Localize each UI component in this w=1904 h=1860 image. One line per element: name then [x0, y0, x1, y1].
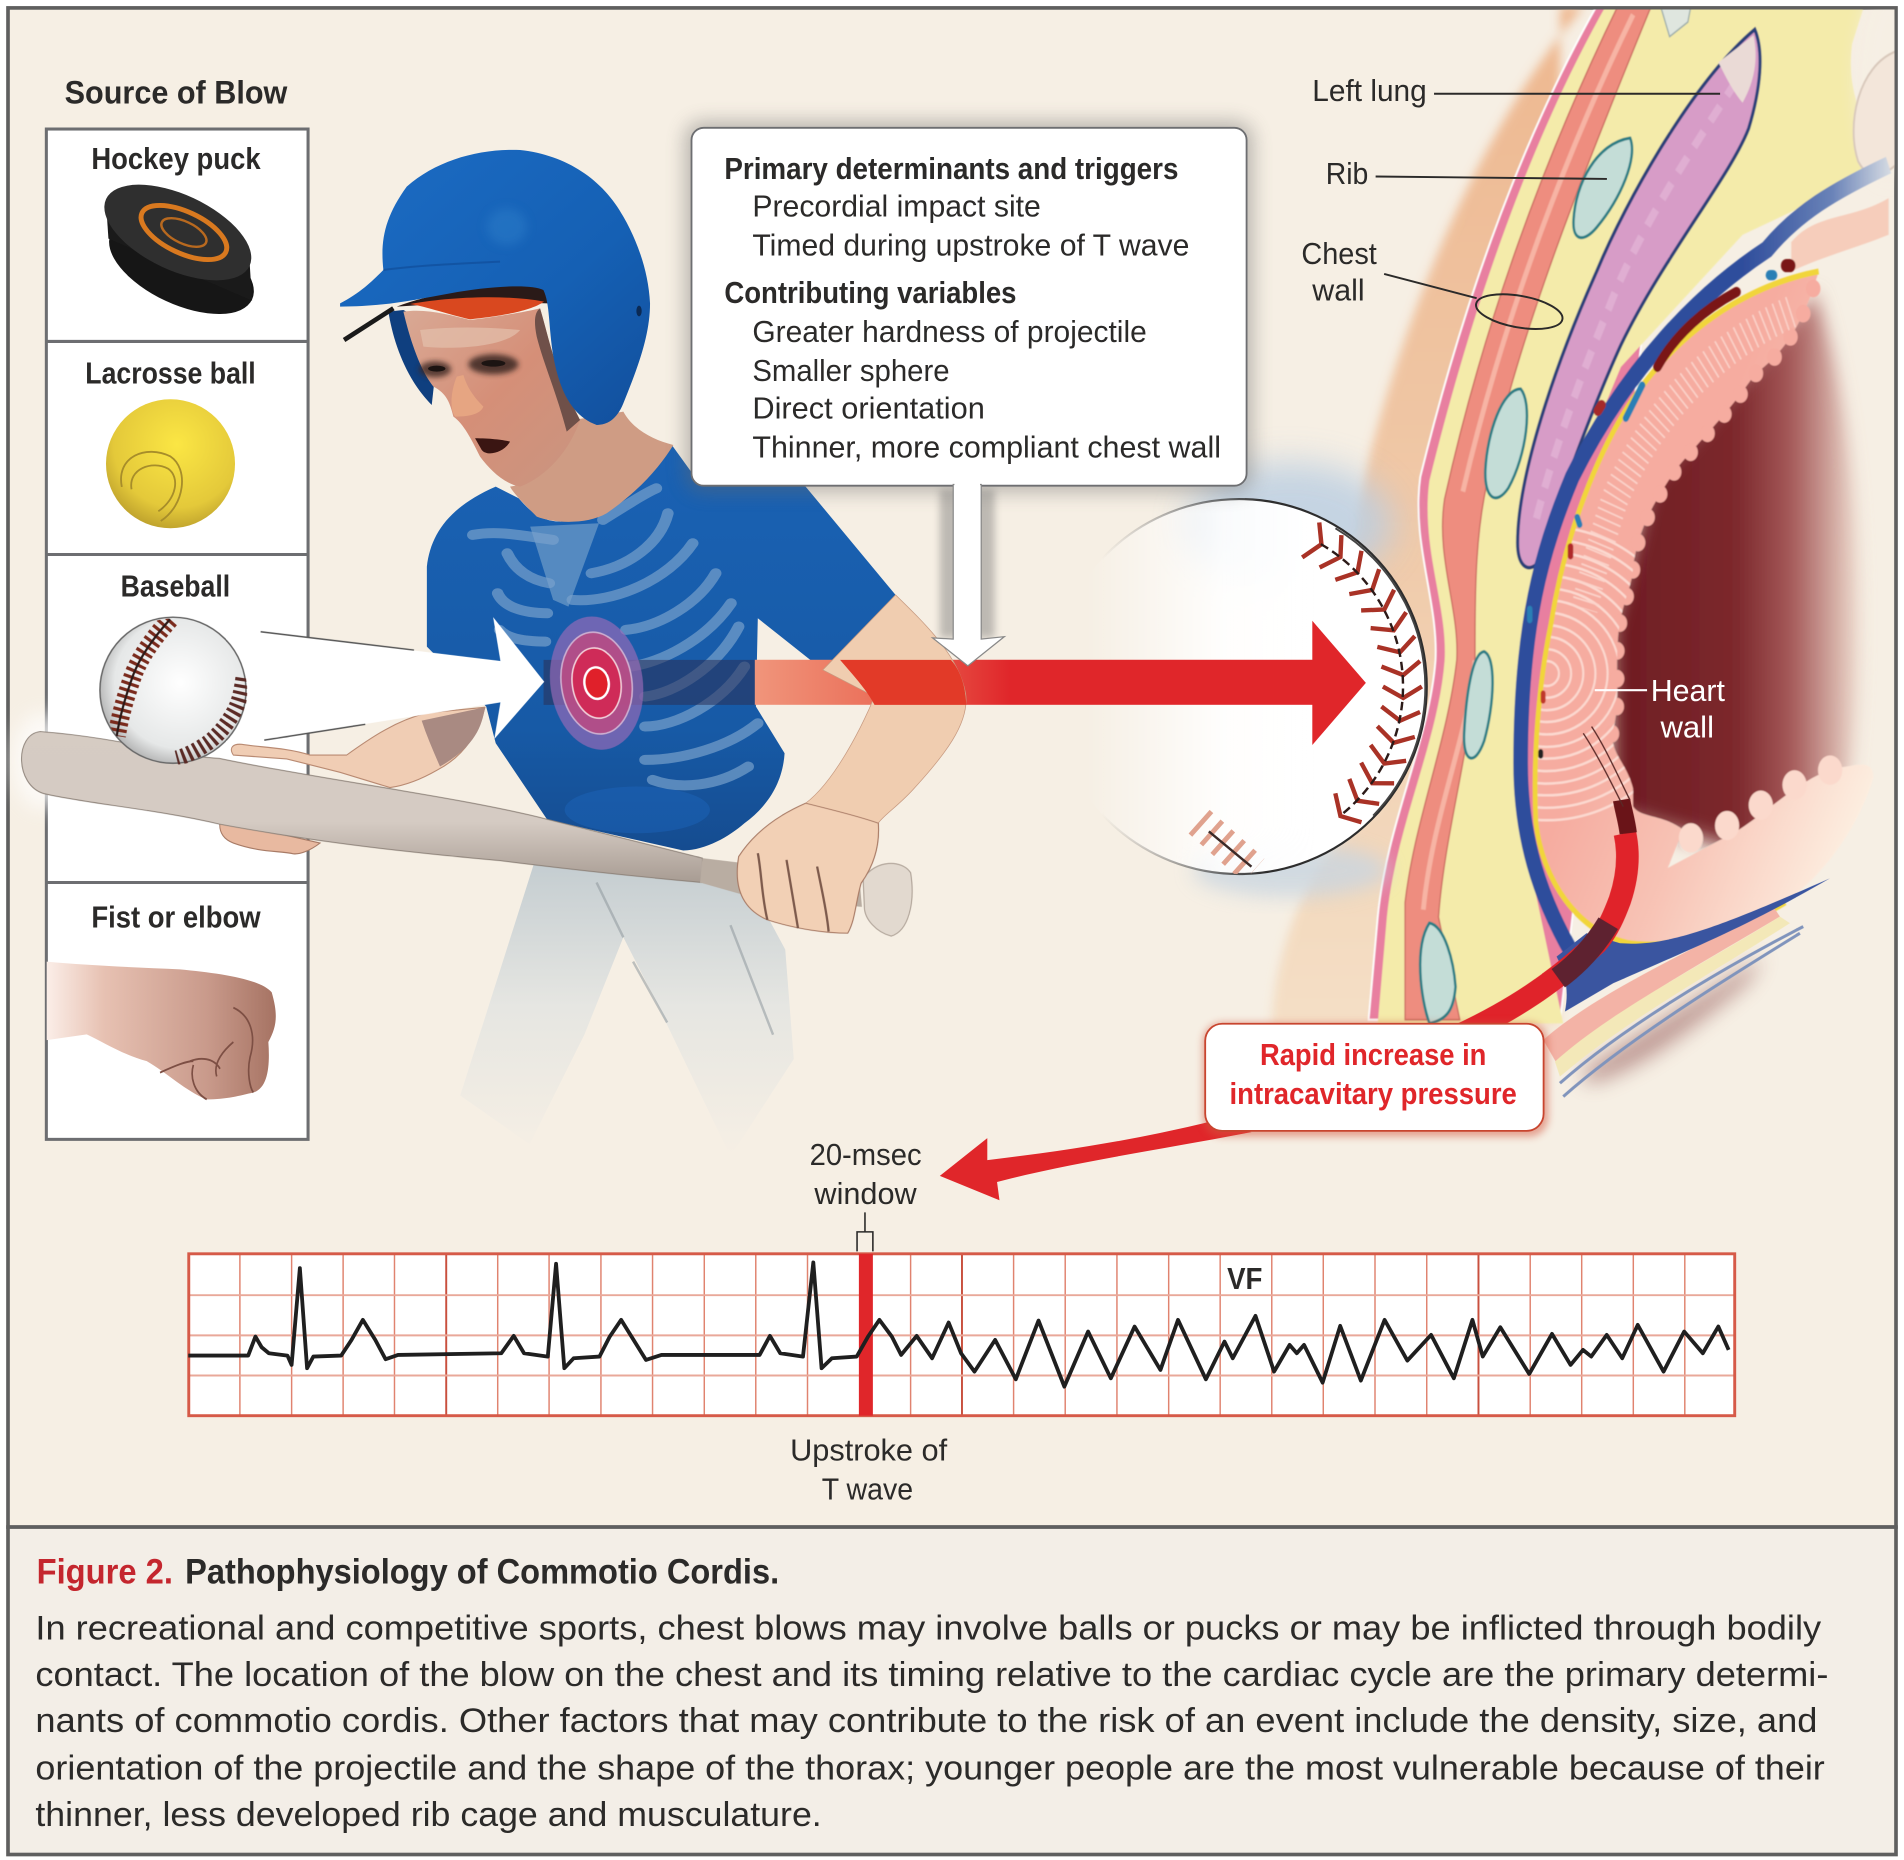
pressure curve	[1460, 833, 1627, 1035]
helmet	[340, 150, 650, 425]
skin layer	[1271, 6, 1584, 1027]
label: heart wall	[1595, 674, 1726, 745]
baseball bat	[22, 732, 702, 883]
ball outline	[1052, 499, 1427, 874]
stitches	[1302, 522, 1422, 822]
T wave upstroke bar	[859, 1254, 873, 1416]
ECG horizontal grid	[189, 1295, 1735, 1376]
label: heart wall: Heart	[1651, 674, 1726, 708]
pericardial yellow line	[1535, 271, 1819, 944]
anatomy: chest wall and heart cross-section	[1271, 0, 1904, 1027]
left eye socket	[419, 361, 451, 377]
label: chest wall	[1301, 237, 1565, 335]
icon: hockey puck	[90, 165, 268, 334]
source of blow panel	[46, 129, 308, 1139]
left stitches	[117, 619, 170, 736]
dark seam	[1321, 544, 1403, 816]
face	[403, 308, 580, 487]
ECG bold grid	[446, 1254, 1478, 1416]
rib 1	[1573, 138, 1632, 238]
helmet highlight	[487, 208, 527, 245]
callout: determinants and variables	[692, 128, 1247, 486]
shirt	[427, 445, 896, 851]
muscle fibre streaks	[1423, 15, 1633, 910]
callout shadow	[685, 122, 1253, 492]
callout: rapid increase in pressure: Rapid increase in	[1260, 1038, 1486, 1072]
chest muscle layer	[1405, 6, 1651, 1020]
ribcage	[473, 488, 758, 785]
caption panel	[8, 1527, 1896, 1855]
lung tip highlight	[1718, 35, 1756, 103]
label: upstroke of T wave: T wave	[822, 1473, 913, 1507]
diaphragm shadow	[1580, 957, 1763, 1083]
chin strap	[344, 308, 393, 340]
coronary vessel dark red	[1657, 292, 1737, 367]
lower heart structures and pressure curve	[1460, 727, 1830, 1097]
bat handle	[700, 858, 862, 907]
finger gaps	[758, 853, 829, 932]
figure number: Figure 2.	[37, 1553, 173, 1592]
VF label: VF	[1227, 1262, 1262, 1296]
ECG strip	[188, 1254, 1735, 1416]
icon: fist	[47, 962, 276, 1099]
label: chest wall: wall	[1311, 274, 1365, 308]
caption line: In recreational and competitive sports, chest blows may involve balls or pucks or may be inflicted through bodily	[35, 1610, 1822, 1648]
panel boxes	[46, 129, 308, 1139]
down arrow shadow	[940, 489, 995, 638]
callout: rapid increase in pressure	[1205, 1024, 1544, 1131]
callout line: Direct orientation	[752, 392, 985, 426]
label: 20-msec window	[810, 1138, 922, 1251]
source of blow heading: Source of Blow	[65, 73, 288, 110]
arrow upper and lower edges	[261, 632, 414, 740]
caption line: orientation of the projectile and the shape of the thorax; younger people are the most vulnerable because of their	[35, 1750, 1825, 1788]
white down arrow from callout	[933, 484, 1004, 666]
callout line: Smaller sphere	[752, 354, 950, 388]
pants fold lines	[597, 883, 773, 1035]
coronary vessels blue and red	[1530, 266, 1790, 756]
label: 20-msec window: window	[813, 1177, 918, 1211]
nose	[451, 375, 483, 417]
left arm and upper hand	[220, 707, 485, 854]
icon: lacrosse ball	[106, 399, 235, 528]
arrow head	[1312, 621, 1366, 745]
player illustration	[220, 445, 896, 1156]
pants	[460, 858, 794, 1156]
label: rib: Rib	[1326, 157, 1368, 191]
diaphragm lines	[1560, 927, 1803, 1097]
lower hand fingers	[220, 820, 320, 854]
callout line: Greater hardness of projectile	[752, 315, 1147, 349]
aortic pale ring	[1854, 51, 1896, 176]
red arrow to 20-msec window	[940, 1120, 1251, 1200]
great vessel cusp	[1791, 198, 1889, 271]
left eye	[428, 366, 445, 372]
lower seam	[1209, 831, 1251, 867]
rib 4	[1420, 923, 1456, 1023]
helmet visor shadow	[397, 285, 548, 307]
pressure curve dark crossing	[1558, 923, 1608, 978]
white arrow from baseball	[261, 617, 544, 740]
diaphragm pink layer	[1543, 907, 1780, 1063]
edge highlight seam	[1335, 528, 1425, 816]
lower heart lobes	[1691, 767, 1858, 838]
band across shirt	[544, 660, 756, 705]
right eye	[481, 360, 505, 367]
callout heading 1: Primary determinants and triggers	[724, 152, 1178, 186]
heart wall radial fibres	[1584, 312, 1791, 609]
left seam	[117, 619, 170, 736]
baseball label: Baseball	[121, 569, 230, 603]
neck	[510, 412, 673, 522]
helmet earflap front	[388, 310, 440, 405]
big baseball	[1110, 498, 1428, 876]
label: 20-msec window: 20-msec	[810, 1138, 922, 1172]
pericardial blue band	[1521, 165, 1889, 954]
belly shading	[565, 787, 710, 833]
arrow shaft	[755, 660, 1315, 705]
right arm, bat and front hand	[12, 595, 966, 936]
gripping hand	[737, 803, 879, 933]
panel dividers	[46, 341, 308, 883]
right stitches	[177, 678, 243, 758]
white cover for callout seam	[954, 482, 980, 489]
sleeve shadow on arm	[422, 707, 485, 767]
brim line	[383, 262, 500, 270]
callout line: Thinner, more compliant chest wall	[752, 431, 1221, 465]
callout: rapid increase in pressure: intracavitary pressure	[1230, 1077, 1517, 1111]
inner helmet shade	[535, 308, 580, 432]
figure title: Pathophysiology of Commotio Cordis.	[185, 1553, 779, 1592]
ECG trace	[188, 1262, 1729, 1387]
bat knob	[863, 863, 912, 936]
heart cavity	[1612, 293, 1858, 851]
heart muscle fine lines	[1583, 727, 1630, 807]
red tint on arm	[840, 660, 966, 705]
ECG grid	[240, 1254, 1685, 1416]
torso frame	[427, 445, 896, 851]
pink dermal layer	[1367, 10, 1642, 1022]
top pale structure	[1660, 6, 1691, 37]
forehead highlight	[420, 327, 520, 348]
big baseball lower glow	[1193, 844, 1388, 897]
caption line: nants of commotio cordis. Other factors that may contribute to the risk of an event include the density, size, and	[35, 1702, 1817, 1740]
upper right fade	[1858, 0, 1904, 176]
lacrosse ball label: Lacrosse ball	[85, 356, 256, 390]
rib 2	[1485, 389, 1527, 498]
label: chest wall: Chest	[1301, 237, 1377, 271]
caption line: contact. The location of the blow on the chest and its timing relative to the cardiac cycle are the primary determi-	[35, 1656, 1828, 1694]
hockey puck label: Hockey puck	[91, 142, 261, 176]
ECG background	[189, 1254, 1735, 1416]
subcutaneous fat layer	[1378, 6, 1882, 1023]
label: left lung: Left lung	[1312, 74, 1427, 108]
mouth	[475, 438, 510, 453]
visor underside	[410, 297, 544, 319]
ECG frame	[189, 1254, 1735, 1416]
rib 3	[1464, 651, 1493, 758]
right arm	[739, 595, 966, 883]
big baseball glow	[1187, 463, 1394, 584]
pressure curve upper dark end	[1622, 800, 1628, 833]
sternum	[530, 523, 599, 607]
lower blue wedge	[1557, 878, 1830, 1012]
lower faded stitches	[1199, 822, 1254, 870]
player head	[340, 150, 673, 522]
bat glow	[12, 712, 73, 809]
callout line: Precordial impact site	[752, 190, 1041, 224]
small baseball icon	[100, 617, 246, 763]
callout line: Timed during upstroke of T wave	[752, 229, 1189, 263]
red impact arrow	[755, 621, 1366, 745]
heart wall scallops	[1612, 271, 1819, 734]
label: upstroke of T wave: Upstroke of	[790, 1434, 948, 1468]
left lung	[1518, 29, 1760, 568]
helmet vent hole	[636, 306, 642, 316]
caption line: thinner, less developed rib cage and musculature.	[35, 1796, 822, 1834]
pressure callout shadow	[1203, 1023, 1548, 1137]
fist finger folds	[160, 1008, 253, 1099]
heart wall	[1535, 271, 1873, 944]
impact target on chest	[541, 610, 652, 756]
diaphragm pale layer	[1555, 917, 1790, 1077]
fist label: Fist or elbow	[91, 901, 261, 935]
heart wall concentric fibres	[1536, 528, 1636, 822]
lung mottling	[1536, 81, 1737, 521]
right eye socket	[468, 354, 518, 374]
label: upstroke of T wave	[790, 1434, 948, 1507]
callout heading 2: Contributing variables	[724, 276, 1017, 310]
label: heart wall: wall	[1659, 711, 1714, 745]
